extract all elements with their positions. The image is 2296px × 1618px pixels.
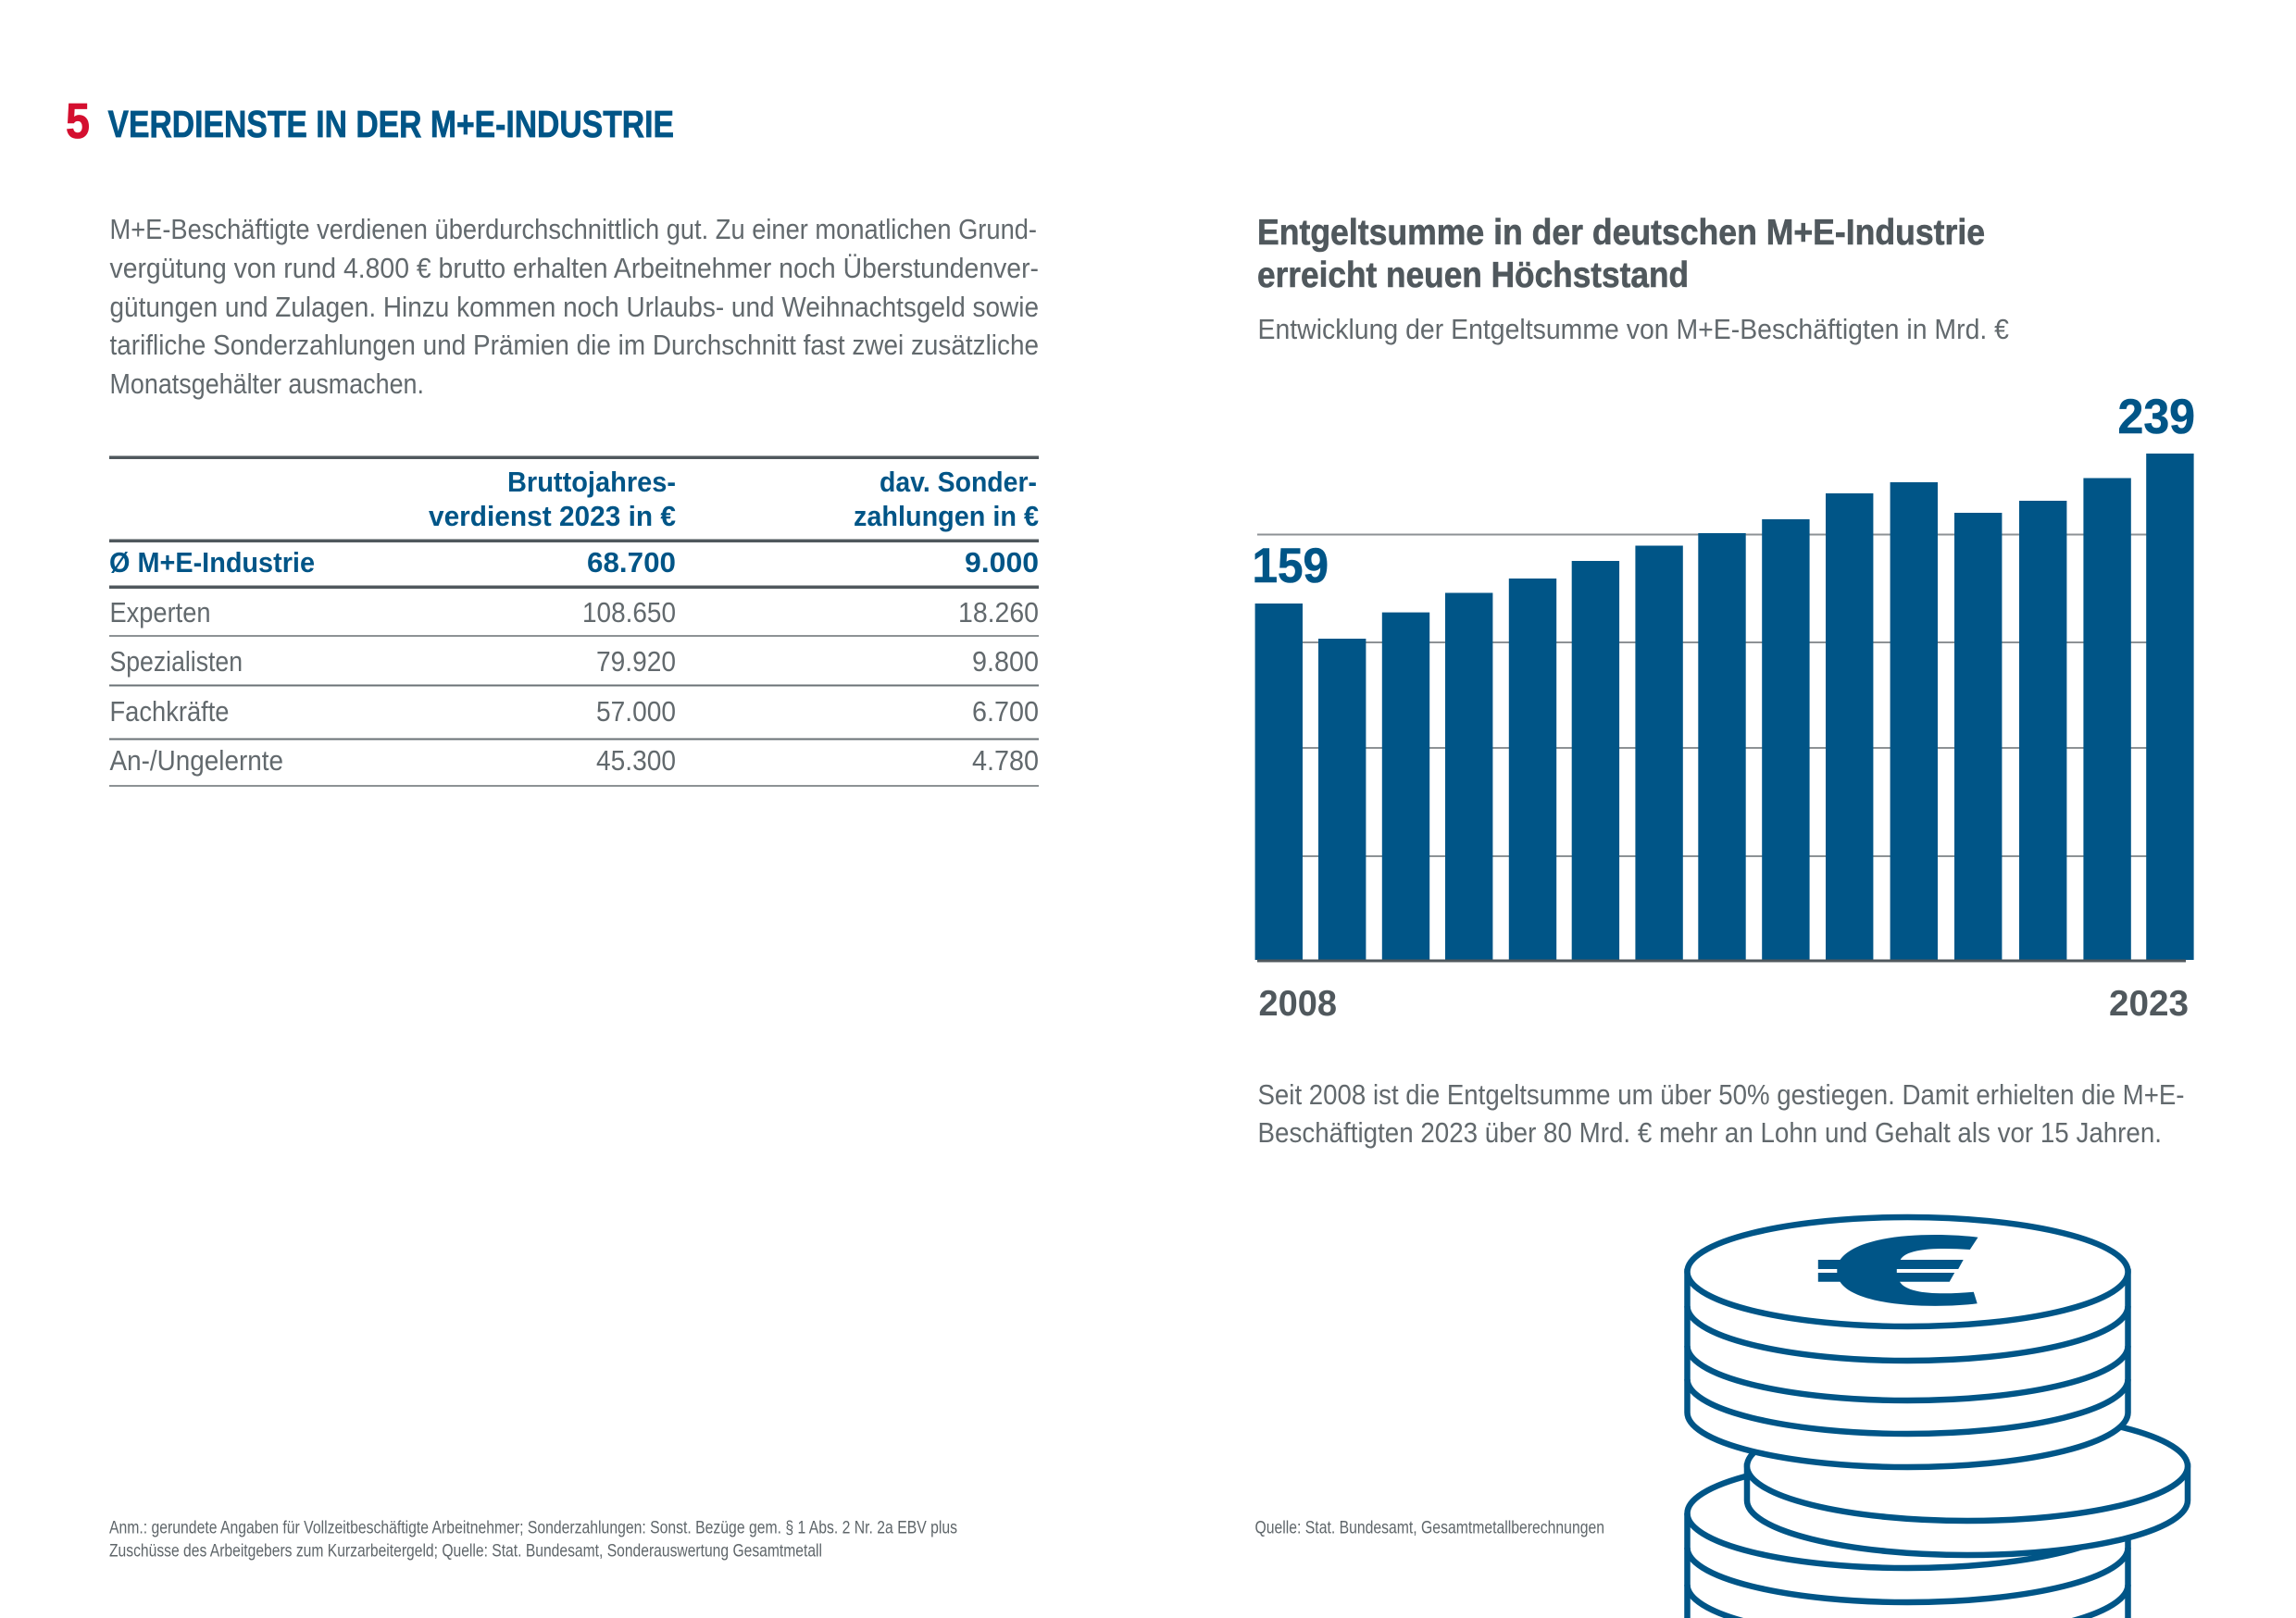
footnote: left (109, 1518, 957, 1561)
footnote: left: Zuschüsse des Arbeitgebers zum Kurzarbeitergeld; Quelle: Stat. Bundesamt, Sonderauswertung Gesamtmetall (109, 1540, 822, 1561)
table row: Fachkräfte: 6.700 (972, 695, 1039, 728)
chart heading (1257, 213, 1985, 295)
footnote: left: Anm.: gerundete Angaben für Vollzeitbeschäftigte Arbeitnehmer; Sonderzahlungen: Sonst. Bezüge gem. § 1 Abs. 2 Nr. 2a EBV plus (109, 1518, 957, 1538)
icon: euro symbol (1818, 1235, 1978, 1306)
icon: stack of euro coins (1687, 1217, 2188, 1618)
table header: dav. Sonder- (880, 466, 1037, 498)
table row: Experten: 18.260 (958, 596, 1039, 629)
table row: Experten: 108.650 (582, 596, 676, 629)
text block: intro paragraph: Monatsgehälter ausmachen. (109, 367, 424, 400)
table row: average: 68.700 (587, 546, 676, 579)
bar chart (1252, 390, 2195, 1024)
table row: Fachkräfte (109, 695, 1039, 728)
axis label: 2008: 2008 (1259, 984, 1337, 1024)
table header: zahlungen in € (854, 500, 1039, 532)
table header: verdienst 2023 in € (429, 500, 676, 532)
text block: intro paragraph: tarifliche Sonderzahlungen und Prämien die im Durchschnitt fast zwei zusätzliche (109, 329, 1039, 361)
lower coin stack (1687, 1459, 2128, 1618)
table row: Experten: Experten (109, 596, 211, 629)
text block: chart commentary: Beschäftigten 2023 über 80 Mrd. € mehr an Lohn und Gehalt als vor 15 Jahren. (1257, 1116, 2162, 1149)
text block: chart commentary (1257, 1078, 2185, 1149)
text block: chart commentary: Seit 2008 ist die Entgeltsumme um über 50% gestiegen. Damit erhielten die M+E- (1257, 1078, 2185, 1111)
table row: Spezialisten: 79.920 (596, 645, 676, 678)
table row: An-/Ungelernte (109, 744, 1039, 777)
text block: intro paragraph: gütungen und Zulagen. Hinzu kommen noch Urlaubs- und Weihnachtsgeld sowie (109, 291, 1039, 323)
table row: An-/Ungelernte: 4.780 (972, 744, 1039, 777)
chart heading: Entgeltsumme in der deutschen M+E-Industrie (1257, 213, 1985, 253)
value label: 2023: 239 (2118, 390, 2195, 444)
text block: intro paragraph: vergütung von rund 4.800 € brutto erhalten Arbeitnehmer noch Überstundenver- (109, 252, 1039, 284)
title: VERDIENSTE IN DER M+E-INDUSTRIE (107, 103, 674, 145)
table row: average: 9.000 (965, 546, 1039, 579)
table row: Experten (109, 596, 1039, 629)
table row: average (109, 546, 1039, 579)
value label: 2008: 159 (1252, 539, 1329, 593)
table row: average: Ø M+E-Industrie (109, 546, 315, 579)
table row: Fachkräfte: Fachkräfte (109, 695, 230, 728)
table: earnings by qualification (109, 455, 1039, 787)
table row: Spezialisten: Spezialisten (109, 645, 243, 678)
chart heading: erreicht neuen Höchststand (1257, 255, 1689, 295)
section number: 5 (66, 93, 90, 149)
table row: Spezialisten: 9.800 (972, 645, 1039, 678)
chart subtitle: Entwicklung der Entgeltsumme von M+E-Beschäftigten in Mrd. € (1257, 313, 2009, 345)
offset middle coin (1747, 1412, 2188, 1555)
text block: intro paragraph: M+E-Beschäftigte verdienen überdurchschnittlich gut. Zu einer monatlichen Grund- (109, 213, 1037, 245)
footnote: right: Quelle: Stat. Bundesamt, Gesamtmetallberechnungen (1255, 1518, 1604, 1538)
table row: Spezialisten (109, 645, 1039, 678)
upper coin stack (1687, 1217, 2128, 1467)
text block: intro paragraph (109, 213, 1039, 400)
table row: Fachkräfte: 57.000 (596, 695, 676, 728)
table header: Bruttojahres- (507, 466, 676, 498)
table row: An-/Ungelernte: 45.300 (596, 744, 676, 777)
table header (429, 466, 1039, 532)
axis label: 2023: 2023 (2109, 984, 2189, 1024)
table row: An-/Ungelernte: An-/Ungelernte (109, 744, 283, 777)
